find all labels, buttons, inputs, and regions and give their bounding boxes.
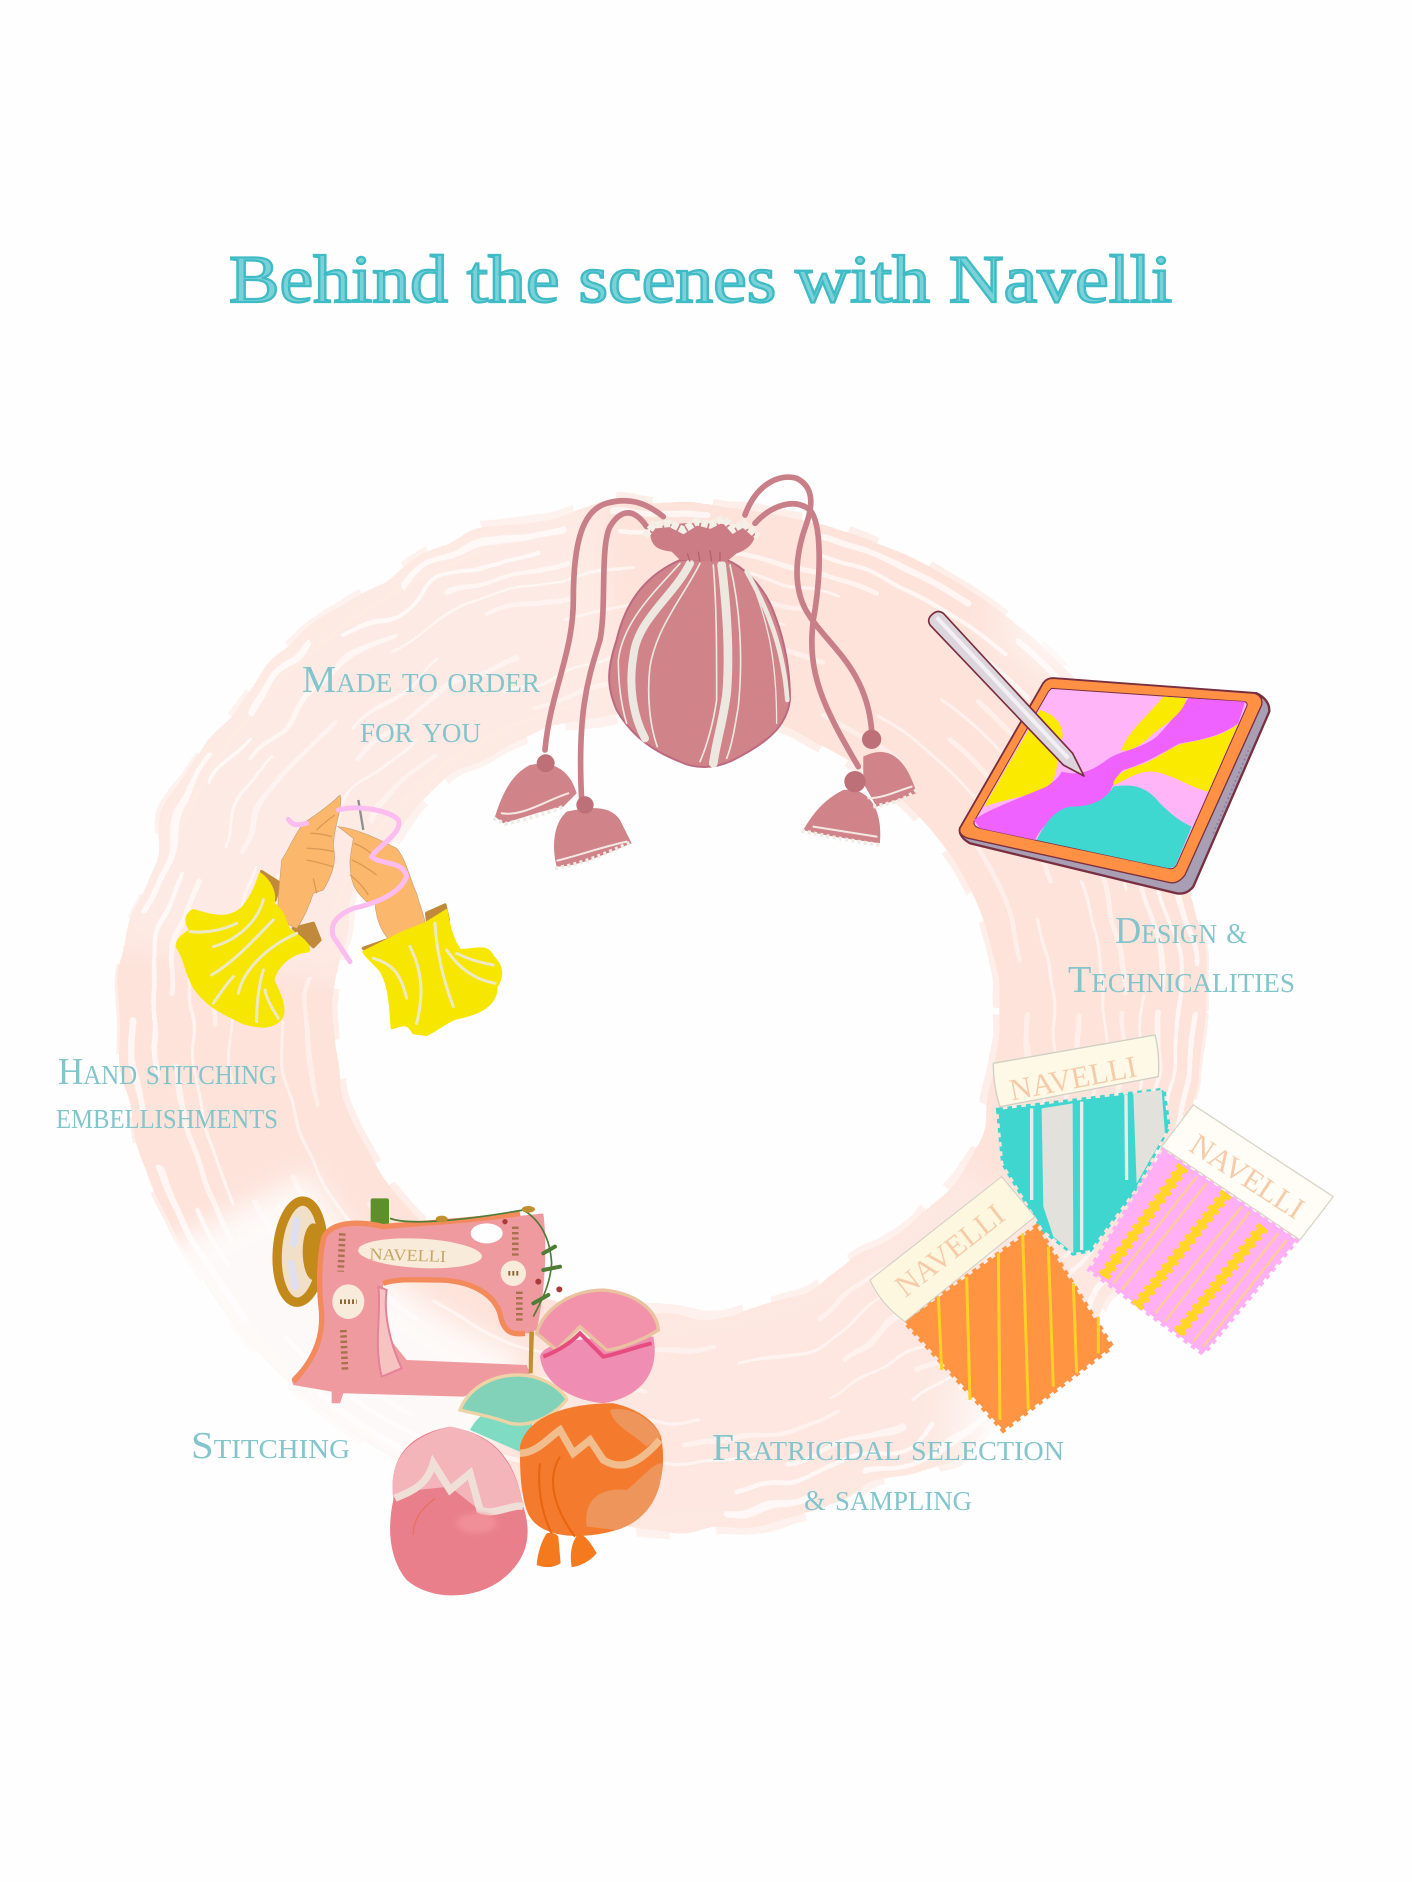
icon: tablet and stylus [929, 611, 1269, 894]
label: made to order: for you [360, 709, 481, 751]
icon: coral potli [390, 1427, 528, 1595]
label: made to order: Made to order [302, 659, 540, 701]
icon: fabric swatches [870, 1035, 1333, 1430]
label: made to order [302, 659, 540, 751]
label: fratricidal selection and sampling: & sampling [804, 1477, 972, 1519]
finger lines [307, 815, 377, 895]
icon: pink potli top right [537, 1290, 658, 1403]
brush-stroke ring [126, 501, 1250, 1529]
label: design and technicalities: Design & [1115, 910, 1247, 952]
right cuff [363, 910, 501, 1035]
title: Behind the scenes with Navelli [229, 241, 1172, 317]
swatch: orange and yellow [870, 1177, 1112, 1430]
needle [358, 800, 363, 830]
label: hand stitching embellishments: embellishments [56, 1095, 278, 1137]
label: design and technicalities [1068, 910, 1295, 1001]
thread [288, 808, 407, 962]
swatch: pink and yellow: NAVELLI [1184, 1127, 1310, 1226]
left cuff [177, 873, 309, 1027]
swatch: teal and grey: NAVELLI [1007, 1050, 1140, 1107]
label: fratricidal selection and sampling: Fratricidal selection [712, 1427, 1064, 1469]
cuff stripes [190, 900, 495, 1023]
icon: teal potli [460, 1375, 567, 1453]
icon: potli bag [493, 477, 917, 868]
icon: orange potli [520, 1403, 663, 1567]
right hand [338, 827, 425, 947]
swatch: orange and yellow: NAVELLI [889, 1197, 1011, 1303]
swatch: teal and grey [993, 1035, 1168, 1253]
label: hand stitching embellishments: Hand stitching [58, 1051, 277, 1093]
icon: sewing machine: NAVELLI [369, 1244, 446, 1266]
label: fratricidal selection and sampling [712, 1427, 1064, 1519]
icon: sewing machine [274, 1198, 562, 1403]
icon: hands stitching [177, 795, 501, 1035]
label: design and technicalities: Technicalities [1068, 959, 1295, 1001]
label: hand stitching embellishments [56, 1051, 278, 1137]
swatch: pink and yellow [1090, 1105, 1333, 1353]
label: stitching: Stitching [191, 1425, 350, 1467]
left hand [278, 795, 341, 928]
